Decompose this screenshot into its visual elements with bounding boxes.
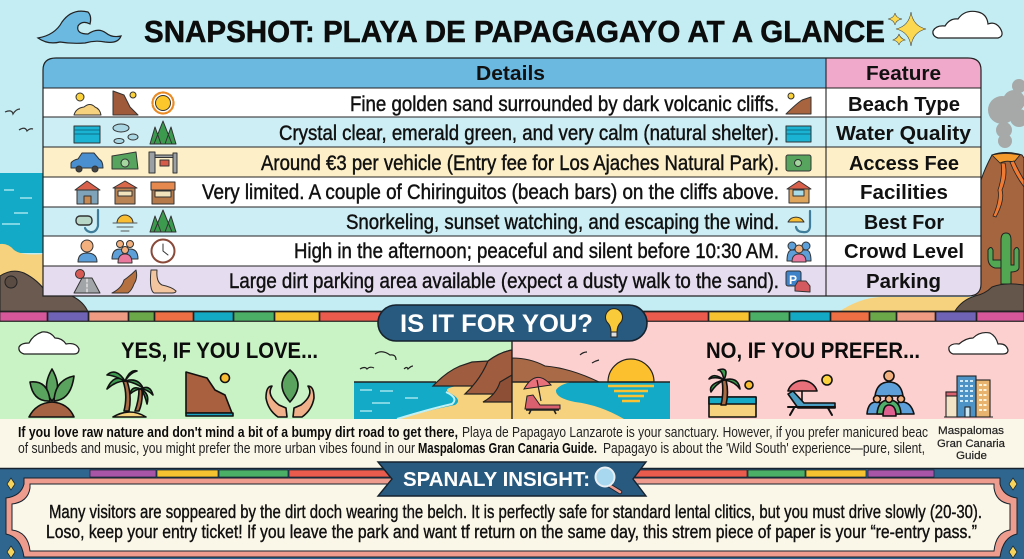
feature labels: Facilities [860, 182, 948, 204]
paragraph line 1: If you love raw nature and don't mind a bit of a bumpy dirt road to get there, [18, 424, 458, 441]
maspalomas caption [937, 425, 1006, 462]
icon: hands and leaf [266, 370, 314, 417]
icons: water quality [74, 121, 176, 144]
details text: Large dirt parking area available (expect a dusty walk to the sand). [229, 270, 779, 293]
icon: crowd [867, 371, 914, 416]
icon: lounger [788, 375, 835, 415]
feature labels: Best For [864, 212, 944, 234]
paragraph line 2: Papagayo is about the 'Wild South' experience—pure, silent, [603, 440, 925, 457]
icon: magnifier [596, 468, 620, 492]
insight banner [378, 462, 646, 496]
icons: beach type [74, 91, 174, 115]
details text: Snorkeling, sunset watching, and escaping the wind. [346, 211, 779, 234]
salmon frame [6, 478, 1017, 557]
paragraph line 2 [18, 440, 925, 457]
insight title: SPANALY INSIGHT: [403, 469, 590, 491]
icons: access fee [71, 152, 177, 173]
icon: palms [107, 371, 153, 417]
icon: cloud no [949, 333, 1008, 354]
details text: High in the afternoon; peaceful and silent before 10:30 AM. [294, 240, 779, 263]
header labels: Feature [866, 63, 941, 85]
details text: Very limited. A couple of Chiringuitos (beach bars) on the cliffs above. [202, 181, 779, 204]
divider line [511, 341, 513, 419]
no heading: NO, IF YOU PREFER... [706, 338, 920, 363]
feature labels [836, 94, 972, 293]
intro paragraph band [0, 419, 1024, 468]
right volcano scene [840, 79, 1024, 311]
insight text box [12, 484, 1010, 551]
icon: buildings [944, 376, 993, 417]
paragraph line 1 [18, 424, 928, 441]
title: SNAPSHOT: PLAYA DE PAPAGAGAYO AT A GLANCE [144, 14, 885, 49]
background sky [0, 0, 1024, 312]
yes heading: YES, IF YOU LOVE... [121, 338, 318, 363]
feature labels: Beach Type [848, 94, 960, 116]
icons: best for [76, 210, 176, 232]
icon: plant [29, 369, 74, 417]
insight body text [46, 502, 982, 542]
details text: Crystal clear, emerald green, and very calm (natural shelter). [279, 122, 779, 145]
details text [202, 93, 779, 293]
details text: Fine golden sand surrounded by dark volcanic cliffs. [350, 93, 779, 116]
maspalomas caption: Guide [956, 450, 987, 462]
left coast scene [0, 109, 88, 312]
banner text: IS IT FOR YOU? [400, 310, 593, 338]
feature labels: Water Quality [836, 123, 972, 145]
yes panel [0, 321, 512, 419]
icon: sparkles [888, 12, 926, 46]
header row: feature [826, 58, 981, 88]
icon: cloud yes [19, 332, 79, 354]
details text: Around €3 per vehicle (Entry fee for Los Ajaches Natural Park). [261, 152, 779, 175]
is it for you banner [378, 305, 647, 341]
icons: crowd level [78, 240, 174, 263]
icon: light bulb [606, 309, 622, 337]
icons: right column [786, 93, 811, 292]
paragraph line 2: Maspalomas Gran Canaria Guide. [418, 440, 597, 457]
feature labels: Parking [866, 271, 941, 293]
header row: details [43, 58, 826, 88]
paragraph line 2: of sunbeds and music, you might prefer the more urban vibes found in our [18, 440, 415, 457]
feature labels: Crowd Level [844, 241, 964, 263]
icon: resort palm [709, 369, 756, 417]
header labels [476, 63, 941, 85]
no beach scene [512, 352, 670, 419]
table [43, 58, 981, 296]
no panel [512, 321, 1024, 419]
maspalomas caption: Gran Canaria [937, 438, 1006, 450]
row backgrounds [43, 88, 981, 296]
color ribbon [0, 311, 1024, 322]
maspalomas caption: Maspalomas [938, 425, 1005, 437]
P sign letter: P [789, 273, 797, 287]
icon: cliff and sun [186, 372, 233, 416]
icon: cloud [933, 11, 1002, 38]
corner stars [7, 478, 1017, 558]
icons: parking [74, 270, 176, 293]
insight ribbon [90, 470, 934, 477]
icons: facilities [75, 181, 175, 204]
insight panel [0, 462, 1024, 559]
yes beach scene [354, 350, 512, 419]
icon: wave [38, 11, 121, 43]
header labels: Details [476, 63, 545, 85]
feature labels: Access Fee [849, 153, 959, 175]
